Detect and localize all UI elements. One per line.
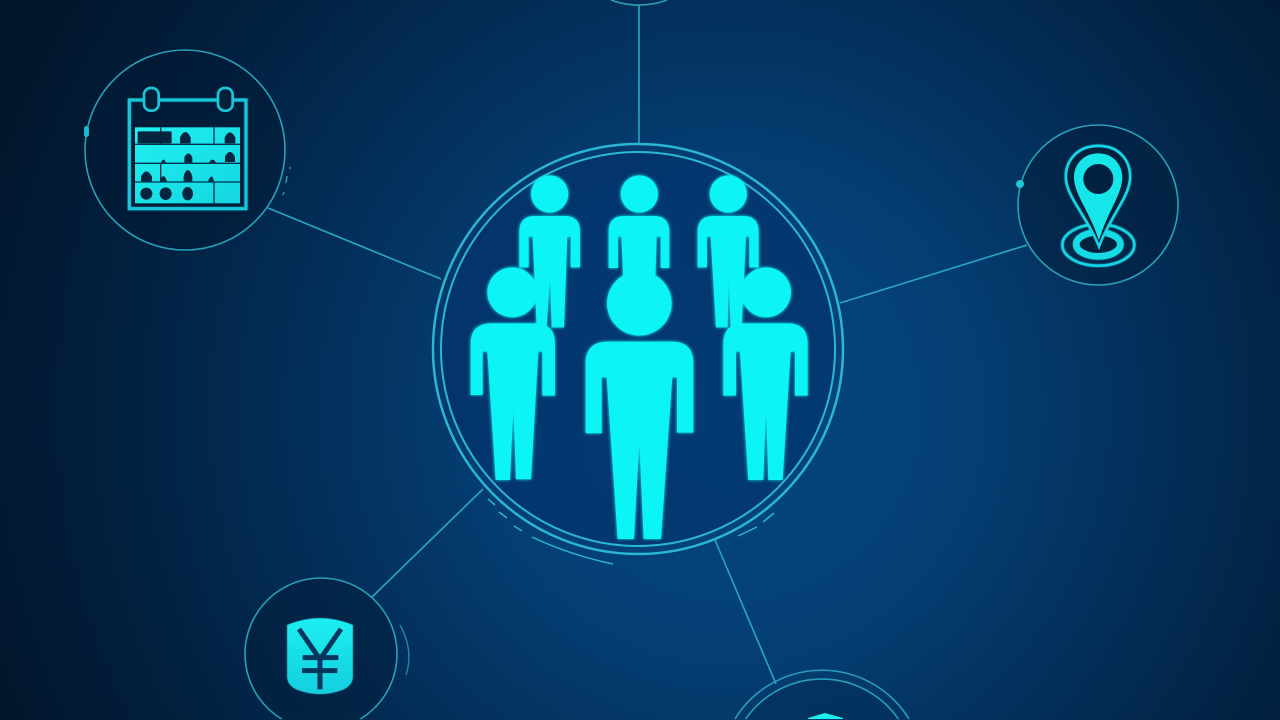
central hub disc and rings: [433, 144, 843, 564]
orbit dashes: [283, 167, 290, 195]
back centre person: [609, 175, 669, 280]
icon: cropped shield: [808, 713, 843, 719]
icon: calendar: [129, 88, 246, 209]
orbit arc: [400, 625, 409, 675]
top node (cropped circle): [611, 0, 667, 5]
icon: group of people: [471, 175, 808, 539]
node: bottom (cropped): [735, 670, 909, 719]
node: yen: [245, 578, 409, 719]
node dot: [84, 126, 89, 137]
connector lines: [268, 5, 1027, 684]
node: calendar: [84, 50, 290, 250]
node dot: [1016, 180, 1024, 188]
icon: yen shield: [287, 618, 353, 694]
icon: map pin: [1062, 146, 1134, 266]
node: location: [1016, 125, 1178, 285]
front right person: [723, 267, 808, 480]
back right person: [698, 175, 759, 327]
front centre person: [586, 271, 693, 539]
back left person: [519, 175, 580, 327]
front left person: [471, 267, 555, 480]
